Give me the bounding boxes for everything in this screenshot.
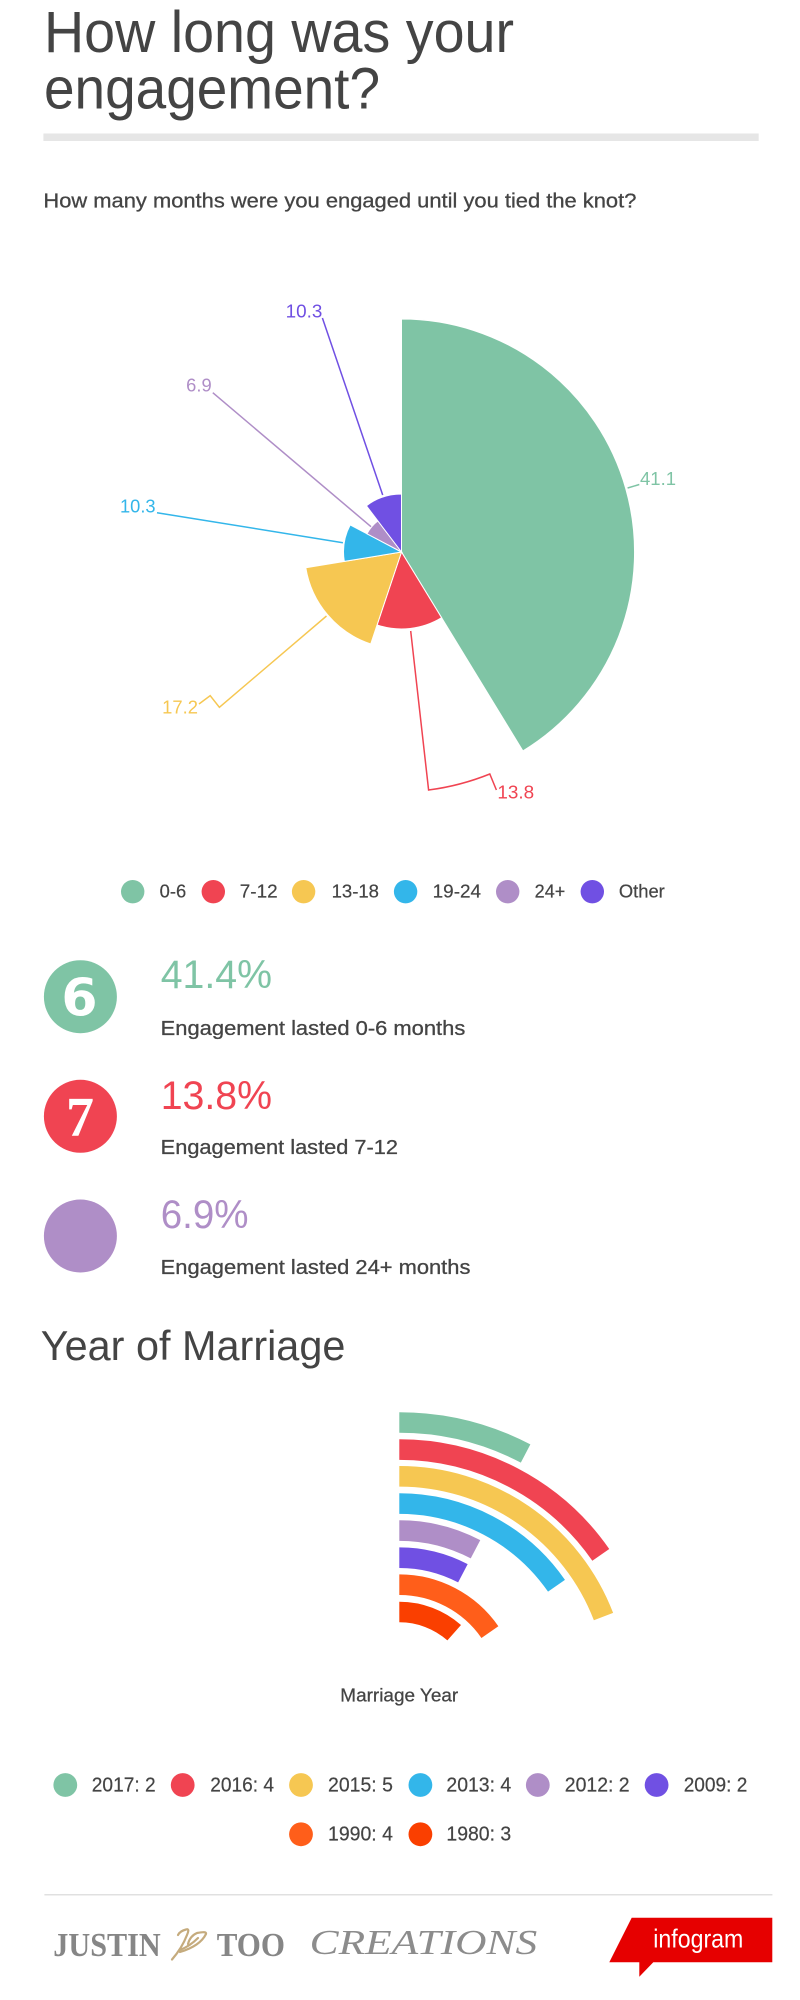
title: How long was your xyxy=(44,0,514,65)
slice: 7-12 xyxy=(377,552,442,629)
slice: 24+ xyxy=(367,521,402,552)
legend: engagement length: 24+ xyxy=(535,882,565,902)
callout: 6.9: 6.9 xyxy=(186,376,212,396)
radial bar chart: marriage year xyxy=(399,1422,604,1633)
logo: Justin Too Creations xyxy=(53,1923,537,1964)
callout: 41.1: 41.1 xyxy=(640,469,676,489)
legend: marriage years: 2009: 2 xyxy=(684,1775,747,1797)
subtitle: How many months were you engaged until you tied the knot? xyxy=(43,190,636,212)
legend: marriage years: 2017: 2 xyxy=(92,1775,156,1797)
legend: marriage years: 2012: 2 xyxy=(565,1775,630,1797)
stat: 13.8%: Engagement lasted 7-12 xyxy=(161,1137,398,1159)
icon: number 7 badge xyxy=(44,1080,117,1153)
legend: marriage years: 1980: 3 xyxy=(446,1824,511,1846)
callout: 10.3 19-24: 10.3 xyxy=(120,497,156,517)
legend: marriage years: 1990: 4 xyxy=(328,1824,393,1846)
slice: 13-18 xyxy=(306,552,402,644)
legend: marriage years: 2013: 4 xyxy=(446,1775,511,1797)
logo: Justin Too Creations: JUSTIN xyxy=(53,1927,161,1964)
bar: 2017 xyxy=(399,1422,526,1454)
stat: 41.4%: Engagement lasted 0-6 months xyxy=(161,1018,465,1040)
callout: 6.9 xyxy=(186,376,371,527)
icon: number 7 badge: 7 xyxy=(66,1087,94,1149)
legend: engagement length: Other xyxy=(619,882,665,902)
legend: marriage years: 2016: 4 xyxy=(210,1775,274,1797)
bar: 1990 xyxy=(399,1585,490,1632)
legend: marriage years xyxy=(53,1773,747,1846)
icon: feather monogram xyxy=(172,1929,206,1960)
title: engagement? xyxy=(44,56,380,122)
slice: 19-24 xyxy=(344,525,402,561)
stat: 41.4% xyxy=(44,953,465,1040)
logo: Justin Too Creations: TOO xyxy=(217,1927,285,1964)
stat: 41.4%: 41.4% xyxy=(161,953,272,997)
stat: 13.8% xyxy=(44,1074,398,1159)
chart label: Marriage Year: Marriage Year xyxy=(340,1686,458,1706)
heading: Year of Marriage: Year of Marriage xyxy=(41,1322,345,1369)
logo: infogram xyxy=(609,1918,772,1977)
stat: 6.9% xyxy=(44,1193,470,1279)
bar: 2016 xyxy=(399,1450,601,1555)
callout: 10.3 19-24 xyxy=(120,497,343,543)
legend: engagement length xyxy=(121,880,665,903)
bar: 2015 xyxy=(399,1476,604,1617)
callout: 13.8: 13.8 xyxy=(497,782,534,802)
legend: engagement length: 7-12 xyxy=(240,882,278,902)
title xyxy=(44,0,514,122)
stat: 6.9%: 6.9% xyxy=(161,1193,248,1237)
callout: 10.3 other xyxy=(286,301,383,495)
callout: 17.2 xyxy=(162,616,326,717)
callout: 13.8 xyxy=(411,631,534,802)
polar pie chart: engagement length xyxy=(306,319,635,751)
bar: 2012 xyxy=(399,1531,476,1549)
stat: 13.8%: 13.8% xyxy=(161,1074,272,1118)
logo: infogram: infogram xyxy=(653,1923,743,1953)
logo: Justin Too Creations: CREATIONS xyxy=(310,1923,537,1962)
legend: engagement length: 13-18 xyxy=(332,882,379,902)
legend: marriage years: 2015: 5 xyxy=(328,1775,393,1797)
bar: 2009 xyxy=(399,1558,463,1573)
slice: 0-6 xyxy=(402,319,635,751)
stat: 6.9%: Engagement lasted 24+ months xyxy=(161,1257,470,1279)
callout: 10.3 other: 10.3 xyxy=(286,301,322,321)
icon: number 6 badge: 6 xyxy=(61,968,98,1028)
icon: blank badge xyxy=(44,1200,117,1272)
bar: 2013 xyxy=(399,1504,556,1586)
icon: number 6 badge xyxy=(44,960,117,1033)
legend: engagement length: 0-6 xyxy=(160,882,186,902)
callout: 17.2: 17.2 xyxy=(162,697,198,717)
bar: 1980 xyxy=(399,1612,454,1633)
slice: Other xyxy=(366,494,402,552)
legend: engagement length: 19-24 xyxy=(433,882,481,902)
